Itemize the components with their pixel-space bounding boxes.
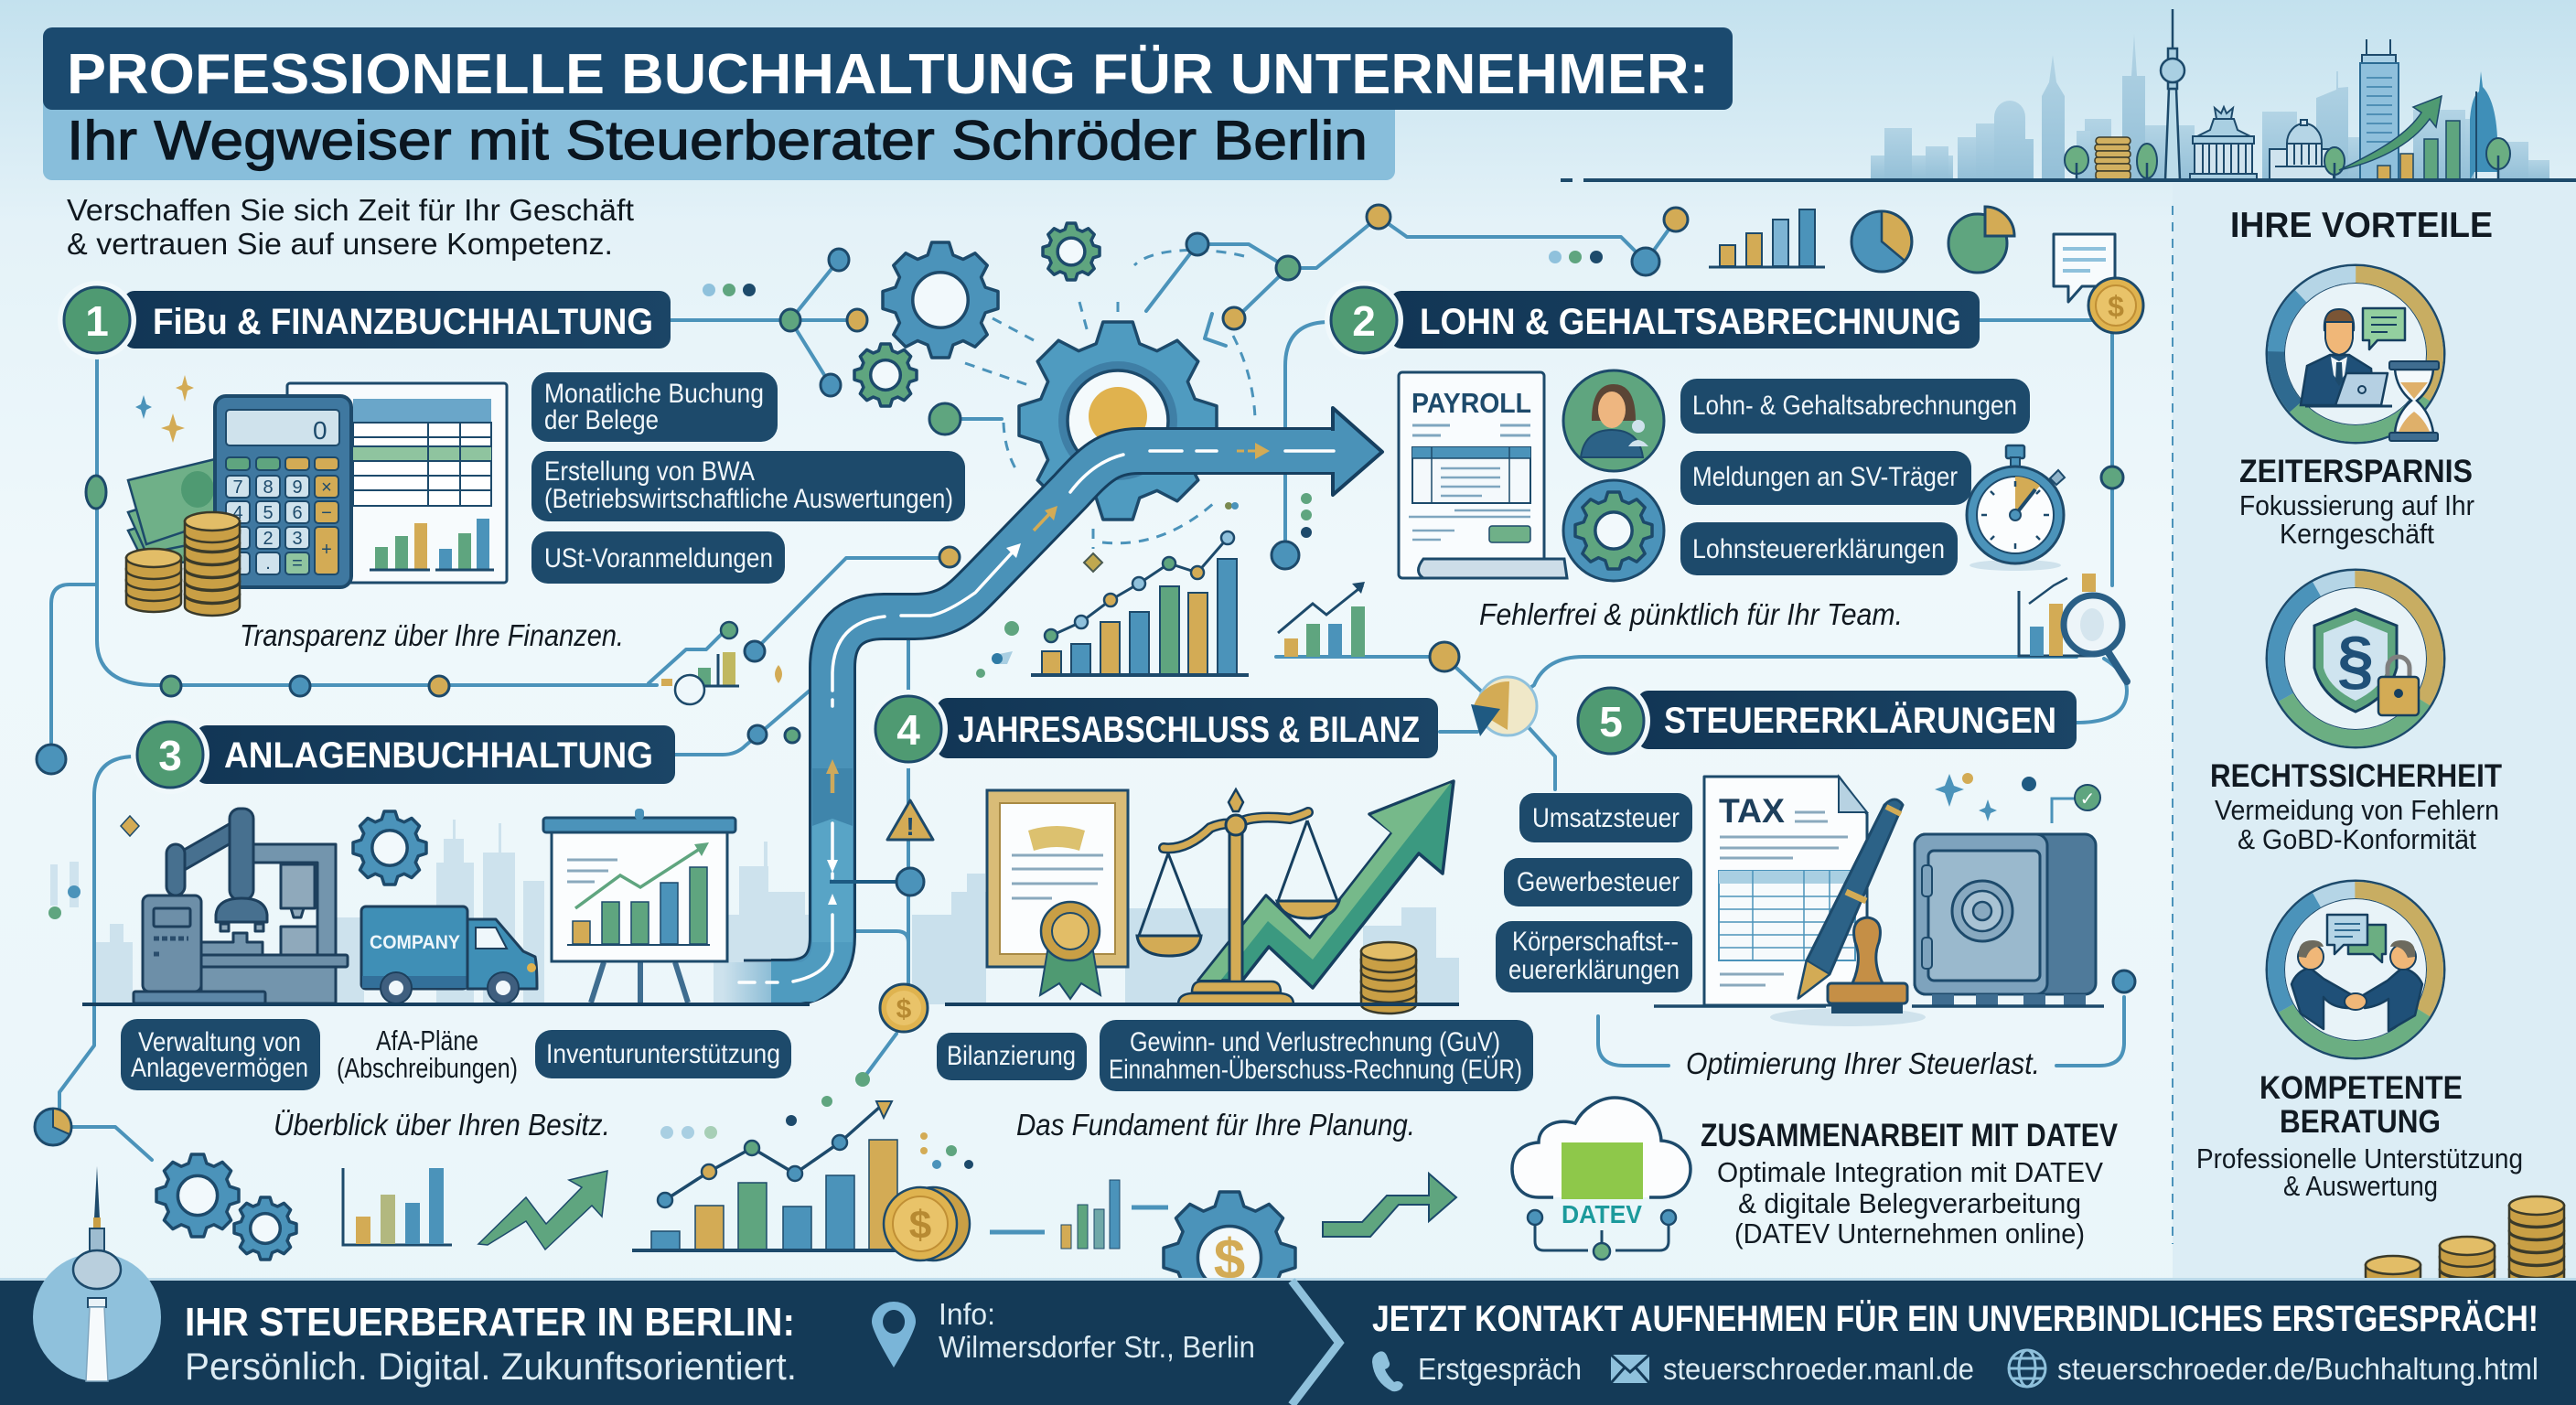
- section 2 header: 2: [1352, 297, 1376, 345]
- pill: inventory: [535, 1030, 791, 1078]
- coin top right: [2088, 278, 2143, 333]
- pill: USt: USt-Voranmeldungen: [544, 543, 773, 574]
- section 1 illustration: calculator, sheet, cash, coins: [126, 375, 507, 616]
- pill: BWA: (Betriebswirtschaftliche Auswertungen): [544, 484, 953, 514]
- pill: Gewerbesteuer: Gewerbesteuer: [1517, 867, 1680, 897]
- small chart with arrow: [1278, 582, 1365, 657]
- DATEV text: & digitale Belegverarbeitung: [1738, 1187, 2081, 1219]
- section 1 header: [58, 281, 671, 359]
- calculator: 9: [292, 477, 303, 498]
- section 2 header: LOHN & GEHALTSABRECHNUNG: [1420, 302, 1961, 342]
- intro text: [67, 193, 634, 261]
- advantage: legal certainty: [2210, 579, 2502, 855]
- section 3 header: ANLAGENBUCHHALTUNG: [224, 735, 653, 776]
- tax document: [1704, 777, 1867, 1005]
- pill: Körperschaftsteuer: Körperschaftst--: [1512, 927, 1679, 957]
- DATEV text: Optimale Integration mit DATEV: [1717, 1156, 2103, 1188]
- title: PROFESSIONELLE BUCHHALTUNG FÜR UNTERNEHMER:: [67, 43, 1709, 106]
- advantage: legal certainty: Vermeidung von Fehlern: [2215, 794, 2499, 826]
- pill: Umsatzsteuer: Umsatzsteuer: [1532, 803, 1680, 833]
- section 1 header: FiBu & FINANZBUCHHALTUNG: [153, 302, 653, 342]
- chevron: [1292, 1281, 1339, 1405]
- pill: inventory: Inventurunterstützung: [546, 1039, 780, 1069]
- contact: website: steuerschroeder.de/Buchhaltung.html: [2057, 1352, 2538, 1386]
- address: Wilmersdorfer Str., Berlin: [939, 1330, 1255, 1364]
- section 4 tagline: Das Fundament für Ihre Planung.: [1016, 1108, 1415, 1142]
- footer left text: IHR STEUERBERATER IN BERLIN:: [185, 1300, 795, 1345]
- title: Ihr Wegweiser mit Steuerberater Schröder Berlin: [67, 110, 1368, 171]
- calculator: 2: [263, 529, 274, 549]
- bottom chart 2: $: [909, 1203, 931, 1248]
- advantage: legal certainty: §: [2337, 624, 2374, 697]
- section 1 pills: [531, 372, 965, 584]
- big green arrow: [1198, 781, 1454, 988]
- text: AfA: (Abschreibungen): [337, 1052, 518, 1084]
- pill: monthly bookings: der Belege: [544, 405, 659, 435]
- trees: [2065, 138, 2510, 178]
- advantage: competent advice: [2196, 890, 2523, 1202]
- base line section 3: [82, 1003, 810, 1006]
- panel background: advantages: [2173, 183, 2576, 1281]
- calculator: [215, 396, 351, 587]
- pill: Umsatzsteuer: [1519, 793, 1692, 842]
- truck: [361, 906, 537, 1003]
- machine: [48, 809, 348, 1003]
- pill: BWA: Erstellung von BWA: [544, 456, 755, 487]
- contact: phone: Erstgespräch: [1418, 1352, 1582, 1386]
- pill: BWA: [531, 451, 965, 521]
- calculator: 5: [263, 503, 274, 523]
- coin on line: $: [896, 994, 912, 1024]
- pill: assets: Anlagevermögen: [131, 1053, 308, 1083]
- magnifier chart: [2019, 574, 2127, 681]
- calculator: 3: [292, 529, 303, 549]
- coins in skyline: [2095, 137, 2131, 179]
- icon: TV tower: [33, 1166, 161, 1381]
- bottom chart 3: [990, 1180, 1168, 1249]
- pill: payroll: [1680, 379, 2030, 434]
- advantage: time saving: Kerngeschäft: [2280, 518, 2434, 550]
- bottom gears: [156, 1154, 296, 1260]
- footer: [0, 1166, 2576, 1405]
- section 4 header: JAHRESABSCHLUSS & BILANZ: [958, 710, 1420, 750]
- icon: globe: [2009, 1350, 2045, 1387]
- pill: Gewerbesteuer: [1504, 858, 1692, 906]
- truck: COMPANY: [370, 932, 460, 953]
- pill: monthly bookings: [531, 372, 778, 442]
- pill: payroll: Lohn- & Gehaltsabrechnungen: [1692, 391, 2017, 421]
- gears center: [854, 223, 1217, 520]
- bottom chart 1: [343, 1168, 452, 1245]
- intro text: Verschaffen Sie sich Zeit für Ihr Geschäft: [67, 193, 634, 227]
- office tower: [2360, 39, 2399, 180]
- intro text: & vertrauen Sie auf unsere Kompetenz.: [67, 227, 613, 261]
- dollar gear: [1164, 1192, 1295, 1324]
- pen: [1798, 799, 1903, 998]
- employee circle icon: [1563, 370, 1664, 471]
- address: Info:: [939, 1297, 995, 1331]
- calculator: −: [321, 503, 332, 523]
- DATEV cloud logo: [1512, 1098, 1690, 1260]
- section 4 header: [869, 690, 1438, 768]
- section 4 header: 4: [896, 706, 920, 754]
- pill: GuV EÜR: [1100, 1020, 1533, 1091]
- section 4 pills: [937, 1020, 1533, 1091]
- pill: wage tax: Lohnsteuererklärungen: [1692, 534, 1945, 564]
- spreadsheet: [287, 383, 507, 583]
- DATEV cloud logo: DATEV: [1562, 1200, 1642, 1228]
- section 3 pills: [121, 1019, 791, 1090]
- advantage: legal certainty: RECHTSSICHERHEIT: [2210, 758, 2502, 794]
- section 5 header: 5: [1599, 698, 1623, 745]
- cash: [128, 459, 215, 567]
- temple: [2190, 107, 2257, 180]
- panel: advantages: [2173, 206, 2564, 1291]
- DATEV text: [1701, 1118, 2119, 1249]
- coin stack section 4: [1361, 942, 1416, 1014]
- pill: Bilanzierung: [937, 1033, 1087, 1080]
- section 5 header: STEUERERKLÄRUNGEN: [1664, 701, 2056, 741]
- section 3 header: 3: [158, 732, 182, 779]
- pill: assets: [121, 1019, 320, 1090]
- icon: location pin: [872, 1302, 916, 1367]
- certificate: [987, 790, 1128, 999]
- connector across road: [830, 880, 896, 884]
- pill: monthly bookings: Monatliche Buchung: [544, 379, 764, 409]
- growth road arrow: [723, 408, 1382, 1003]
- advantage: competent advice: Professionelle Unterstützung: [2196, 1142, 2523, 1174]
- pill: wage tax: [1680, 522, 1958, 575]
- connector network: [37, 205, 2135, 1160]
- calculator: .: [265, 553, 271, 574]
- skyline: [1561, 9, 2576, 182]
- section 5 tagline: Optimierung Ihrer Steuerlast.: [1686, 1046, 2040, 1080]
- safe: [1915, 834, 2096, 1005]
- node at warning line: [896, 868, 924, 896]
- bottom chart 2: [632, 1096, 973, 1260]
- pie charts: [1852, 207, 2014, 273]
- speech bubble: [2054, 234, 2115, 302]
- pill: Körperschaftsteuer: euererklärungen: [1508, 955, 1680, 985]
- road shading: [812, 768, 853, 826]
- warning icon: [887, 800, 933, 841]
- gear section 3: [353, 811, 426, 885]
- dollar gear: $: [1214, 1228, 1245, 1292]
- main bar chart with line: [976, 502, 1249, 678]
- tax document: TAX: [1719, 792, 1785, 830]
- footer left text: [185, 1300, 797, 1388]
- coins: [126, 512, 240, 616]
- calculator: 0: [313, 416, 327, 445]
- calculator: 6: [292, 503, 303, 523]
- footer left text: Persönlich. Digital. Zukunftsorientiert.: [185, 1345, 797, 1388]
- contact: mail: steuerschroeder.manl.de: [1663, 1352, 1974, 1386]
- title: [43, 27, 1733, 180]
- top bar chart: [1709, 209, 1825, 267]
- calculator: +: [321, 540, 332, 560]
- nodes: [37, 205, 2135, 1087]
- section 2 tagline: Fehlerfrei & pünktlich für Ihr Team.: [1479, 597, 1903, 631]
- DATEV text: (DATEV Unternehmen online): [1734, 1217, 2085, 1249]
- pill: SV: Meldungen an SV-Träger: [1692, 462, 1958, 492]
- section 3 tagline: Überblick über Ihren Besitz.: [274, 1108, 610, 1142]
- pie marker: [1471, 677, 1537, 736]
- advantage: time saving: [2239, 241, 2474, 550]
- pill: assets: Verwaltung von: [138, 1027, 301, 1057]
- sparkles and check: ✓: [2080, 789, 2095, 810]
- calculator: =: [292, 553, 303, 574]
- payroll document: [1399, 372, 1567, 578]
- section 1 tagline: Transparenz über Ihre Finanzen.: [240, 618, 624, 652]
- advantage: legal certainty: & GoBD-Konformität: [2238, 823, 2476, 855]
- text: AfA: AfA-Pläne: [376, 1024, 478, 1056]
- domed building: [2270, 120, 2334, 180]
- calculator: ×: [321, 477, 332, 498]
- bottom green arrow: [478, 1171, 607, 1249]
- TV tower: [2161, 9, 2184, 180]
- sparkles and check: [1935, 773, 2100, 823]
- section 1 header: 1: [85, 297, 109, 345]
- coin top right: $: [2108, 290, 2124, 323]
- icon: phone: [1372, 1351, 1403, 1391]
- pill: GuV EÜR: Einnahmen-Überschuss-Rechnung (EÜR): [1109, 1055, 1522, 1085]
- pill: USt: [531, 531, 785, 584]
- coin stacks: [2366, 1196, 2564, 1291]
- advantage: time saving: ZEITERSPARNIS: [2239, 454, 2473, 489]
- payroll document: PAYROLL: [1411, 387, 1531, 419]
- scales: [1137, 789, 1339, 1004]
- calculator: 4: [232, 503, 243, 523]
- stopwatch: [1967, 445, 2065, 571]
- section 5 pills: [1496, 793, 1692, 992]
- gear circle icon: [1563, 480, 1664, 581]
- pill: SV: [1680, 451, 1971, 505]
- address: [939, 1297, 1255, 1364]
- warning icon: !: [906, 812, 915, 841]
- pie node left: [35, 1109, 71, 1145]
- pill: Körperschaftsteuer: [1496, 921, 1692, 992]
- pill: GuV EÜR: Gewinn- und Verlustrechnung (GuV): [1130, 1027, 1500, 1057]
- advantage: competent advice: KOMPETENTE: [2259, 1070, 2463, 1106]
- mini chart near section 1: [649, 622, 782, 704]
- section 5 header: [1572, 681, 2077, 760]
- text: AfA: [337, 1024, 518, 1084]
- road markings: [739, 451, 1334, 982]
- pill: Bilanzierung: Bilanzierung: [947, 1041, 1076, 1071]
- section 2 pills: [1680, 379, 2030, 575]
- section 2 header: [1325, 281, 1980, 359]
- calculator: 8: [263, 477, 274, 498]
- heading: IHRE VORTEILE: [2230, 206, 2493, 245]
- green step arrow: [1323, 1174, 1456, 1237]
- DATEV text: ZUSAMMENARBEIT MIT DATEV: [1701, 1118, 2119, 1153]
- stamp: [1770, 917, 1926, 1026]
- icon: mail: [1611, 1355, 1649, 1383]
- advantage: competent advice: & Auswertung: [2283, 1170, 2438, 1202]
- presentation board: [543, 809, 735, 1003]
- section 3 faint skyline: [96, 820, 811, 1004]
- section 3 header: [131, 715, 675, 794]
- advantage: time saving: Fokussierung auf Ihr: [2239, 489, 2474, 521]
- section 4 faint skyline: [912, 874, 1459, 1004]
- coin on line: [880, 984, 928, 1032]
- skyline bars and arrow: [2377, 121, 2460, 180]
- calculator: 7: [232, 477, 243, 498]
- advantage: competent advice: BERATUNG: [2280, 1104, 2441, 1140]
